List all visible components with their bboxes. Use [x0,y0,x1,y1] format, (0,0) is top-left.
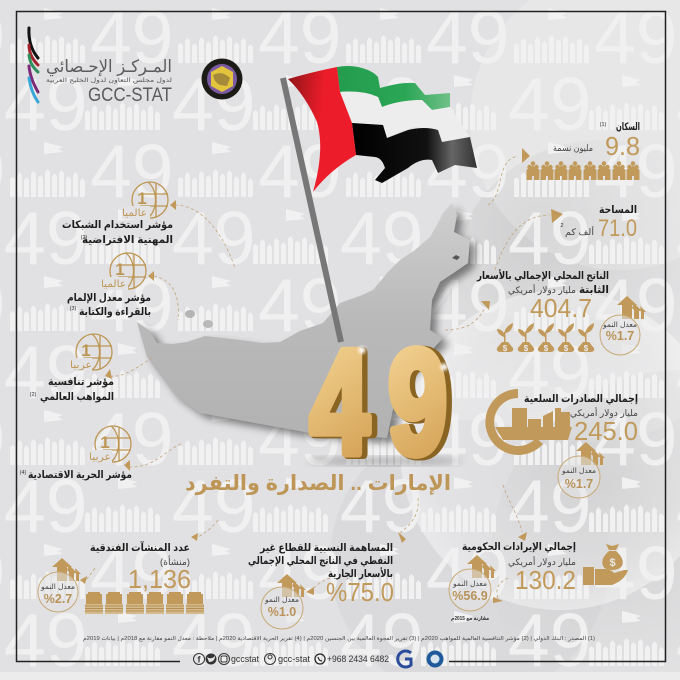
social contact bar: +968 2434 6482 [327,654,389,665]
arrow: title to hotels [191,520,218,541]
stat: GDP constant prices: الناتج المحلي الإجمالي بالأسعار [476,269,609,282]
icon: growth arrows [617,296,646,319]
indicator: global talent competitiveness: عربيا [70,360,92,371]
stat: hotel establishments: 1,136 [128,564,191,594]
icon: GCC emblem [202,58,242,100]
arrow: hotel growth [80,568,95,584]
icon: G logo [398,651,411,667]
stat: government revenue: إجمالي الإيرادات الحكومية [462,541,576,553]
indicator: global talent competitiveness: (2) [30,392,37,398]
arrow: indicator 3 [105,358,152,379]
arrow: area [495,209,563,270]
big gold 49 [307,320,463,486]
stat: area: 71.0 [598,215,637,242]
indicator: virtual professional networks: عالميا [122,208,147,219]
stat: non-oil contribution: بالأسعار الجارية [328,567,393,580]
icon: linkedin profile [264,654,276,664]
arrow: population [488,148,530,205]
stat: GDP constant prices: 404.7 [530,293,592,323]
flag of UAE [288,66,477,192]
stat: government revenue: مقارنة مع 2015م [451,616,489,622]
flag: white band [340,92,470,142]
growth badge: %1.7 [565,477,593,491]
stat: population: (1) [600,122,607,128]
stat: population: 9.8 [605,131,640,161]
map of UAE [137,203,476,443]
indicator: economic freedom: عربيا [89,452,111,463]
stat: non-oil contribution: النفطي في الناتج المحلي الإجمالي [248,555,393,567]
title: الإمارات .. الصدارة والتفرد [185,472,451,495]
stat: merchandise exports: 245.0 [574,416,638,446]
growth badge: معدل النمو [452,579,487,588]
indicator: economic freedom: (4) [20,470,27,476]
arrow: GDP [445,301,490,330]
indicator: virtual professional networks [62,182,173,246]
logo: GCC-STAT: لدول مجلس التعاون لدول الخليج العربية [46,77,172,84]
arrow: indicator 1 [170,200,235,268]
stat: government revenue: مليار دولار أمريكي [508,556,576,567]
arrow: indicator 4 [124,443,183,471]
indicator: economic freedom: مؤشر الحرية الاقتصادية [28,469,132,481]
social contact bar: gccstat [231,654,259,665]
icon: hotel buildings [85,592,204,614]
stat: hotel establishments: (منشأة) [160,555,190,567]
growth badge: معدل النمو [40,582,75,591]
stat: population: السكان [616,121,640,133]
stat: hotel establishments [38,541,204,614]
icon: facebook: f [198,654,202,664]
stat: merchandise exports: إجمالي الصادرات السلعية [524,393,638,405]
growth badge [558,456,600,498]
stat: GDP constant prices: مليار دولار أمريكي [508,284,576,295]
big gold 49: 9 [390,321,449,486]
growth badge: معدل النمو [264,595,299,604]
indicator: literacy rate [67,253,151,318]
stat: merchandise exports [485,389,638,498]
icon: money plants [497,323,594,353]
logo: GCC-STAT [29,28,172,106]
flag: black band [352,123,477,183]
stat: government revenue: 130.2 [515,565,576,595]
indicator: economic freedom [20,426,132,481]
stat: GDP constant prices: الثابتة [579,284,609,296]
social contact bar [194,650,444,668]
stat: area: المساحة [599,204,637,216]
indicator: virtual professional networks: المهنية الافتراضية [82,234,173,246]
stat: population [526,121,640,180]
icon: growth arrows [52,558,81,581]
arrow: title to non-oil [398,498,418,543]
icon: hand with money bag: $ [609,557,616,569]
stat: non-oil contribution: المساهمة النسبية للقطاع غير [259,542,393,554]
flag pole [283,78,341,342]
icon: ribbon [29,28,38,102]
growth badge: معدل النمو [602,320,637,329]
indicator: literacy rate: 1 [115,260,125,279]
stat: area: 2 [560,223,564,229]
growth badge [600,315,640,355]
icon: cargo ship [485,389,572,455]
indicator: global talent competitiveness [30,334,114,403]
stat: area: ألف كم [565,226,594,238]
stat: area [560,204,637,242]
icon: twitter [206,654,216,664]
stat: hotel establishments: عدد المنشآت الفندقية [90,541,190,554]
indicator: literacy rate: عالميا [101,279,126,290]
stat: non-oil contribution: %75.0 [326,577,394,607]
logo: GCC-STAT: GCC-STAT [88,85,172,106]
indicator: virtual professional networks: (2) [81,235,88,241]
indicator: literacy rate: بالقراءة والكتابة [79,306,151,318]
stat: merchandise exports: مليار دولار أمريكي [570,407,638,418]
icon: whatsapp [315,654,325,664]
arrow: exports [503,485,527,541]
indicator: global talent competitiveness: 1 [81,341,91,360]
indicator: global talent competitiveness: المواهب العالمي [40,391,114,403]
icon: people row [526,161,640,180]
growth badge: %1.7 [606,329,634,343]
icon: growth arrows [277,574,306,597]
flag: green band [337,66,450,110]
indicator: virtual professional networks: مؤشر استخدام الشبكات [62,219,173,231]
icon: hand with money bag [583,544,628,585]
flag: red band [288,67,356,192]
growth badge [38,572,78,612]
stat: population: مليون نسمة [553,143,593,153]
growth badge [261,587,303,629]
growth badge: %2.7 [44,592,72,606]
social contact bar: gcc-stat [278,654,310,665]
big gold 49: 4 [315,321,375,486]
stat: GDP constant prices [476,269,646,355]
big gold 49: 4 [312,321,372,486]
big gold 49: 9 [393,321,452,486]
footnotes: (1) المصدر : البنك الدولي | (2) مؤشر التنافسية العالمية للمواهب 2020م | (3) تقرير الفجوة العالمية بين الجنسين 2020م | (4) تقرير الحرية الاقتصادية 2020م | ملاحظة : معدل النمو مقارنة مع 2018م | بيانات 2019م [83,636,595,642]
arrow: non-oil growth [306,578,330,595]
growth badge: معدل النمو [561,466,596,475]
growth badge [449,569,491,611]
arrow: indicator 2 [148,271,178,320]
icon: growth arrows [467,555,496,578]
logo: GCC-STAT: المـركـز الإحـصائي [46,57,172,77]
icon: round badge [426,650,444,668]
growth badge: %56.9 [452,589,488,603]
stat: non-oil contribution [248,542,394,629]
big gold 49: 4 [310,320,369,485]
indicator: global talent competitiveness: مؤشر تنافسية [48,376,114,388]
big gold 49: 9 [388,320,447,485]
stat: government revenue [449,541,628,622]
indicator: literacy rate: مؤشر معدل الإلمام [67,292,151,304]
indicator: literacy rate: (3) [70,306,77,312]
indicator: virtual professional networks: 1 [137,189,147,208]
icon: growth arrows [576,442,605,465]
indicator: economic freedom: 1 [100,433,110,452]
icon: facebook [194,654,204,664]
icon: instagram [218,654,230,664]
growth badge: %1.0 [268,605,296,619]
arrow: revenue growth [493,578,508,603]
